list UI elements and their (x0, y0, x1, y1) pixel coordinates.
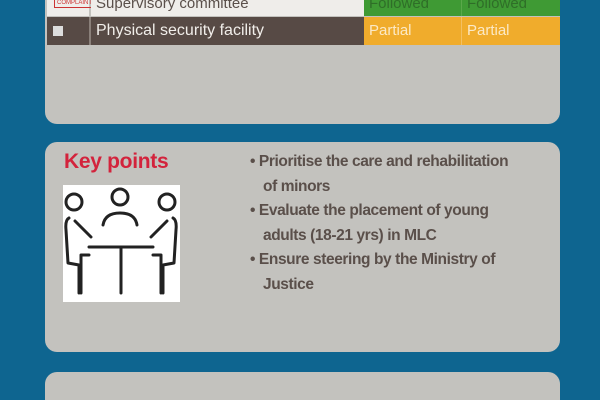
table row: supervisory committee (47, 0, 560, 16)
text block: key point bullets: Justice (263, 276, 314, 293)
text block: key point bullets (250, 153, 508, 293)
table row: physical security facility: Partial (369, 22, 412, 39)
heading: key points: Key points (64, 150, 168, 173)
panel: compliance table (45, 0, 560, 124)
text block: key point bullets: adults (18-21 yrs) in MLC (263, 227, 436, 244)
text block: key point bullets: • Prioritise the care and rehabilitation (250, 153, 508, 170)
table row: supervisory committee: COMPLAINT (57, 0, 92, 6)
panel: next section (45, 372, 560, 400)
table row: physical security facility: Physical security facility (96, 22, 264, 39)
text block: key point bullets: • Ensure steering by the Ministry of (250, 251, 495, 268)
table row: physical security facility (47, 17, 560, 45)
text block: key point bullets: • Evaluate the placement of young (250, 202, 489, 219)
table row: physical security facility: Partial (467, 22, 510, 39)
icon: meeting people at table (63, 185, 180, 302)
text block: key point bullets: of minors (263, 178, 330, 195)
panel: key points (45, 142, 560, 352)
